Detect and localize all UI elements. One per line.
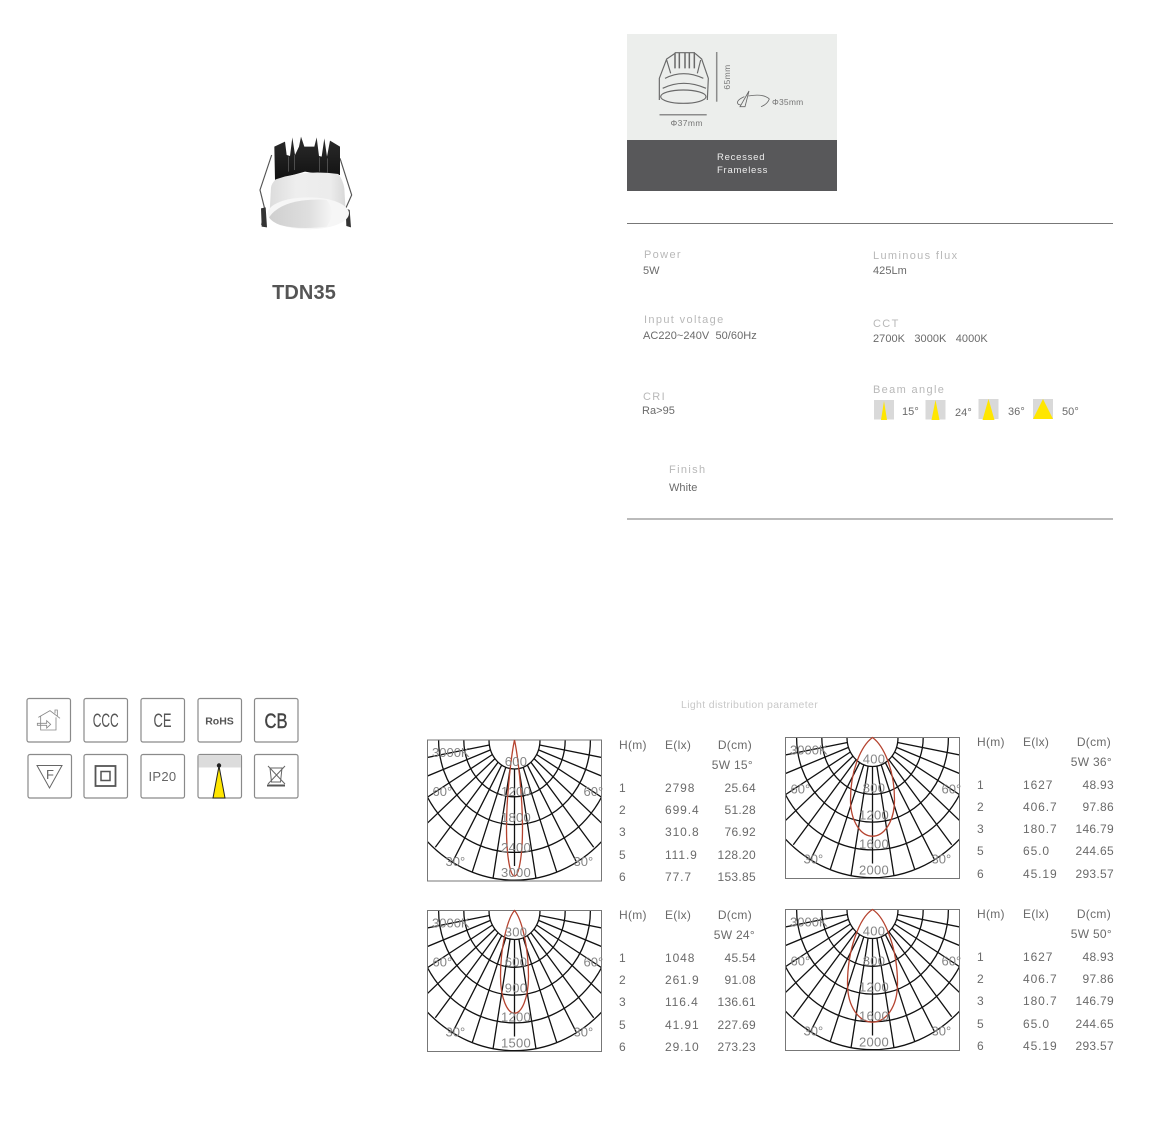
chart: 5W 24 degree polar diagram: 60° — [432, 954, 452, 970]
table: 5W 50 degree: E(lx) — [1023, 907, 1049, 921]
width dimension line — [660, 114, 707, 116]
table: 5W 24 degree: 1 — [619, 951, 626, 965]
table: 5W 15 degree: 25.64 — [724, 781, 756, 795]
icon: CB mark — [254, 698, 298, 742]
table: 5W 15 degree: 5W 15° — [712, 758, 753, 772]
table: 5W 50 degree: D(cm) — [1077, 907, 1111, 921]
table: 5W 24 degree: 261.9 — [665, 973, 700, 987]
product photo: recessed downlight — [260, 137, 352, 229]
table: 5W 24 degree — [619, 908, 756, 1054]
spec: beam angle: 24° — [955, 407, 972, 419]
icon: 15 degree beam — [874, 400, 894, 420]
icon: F mark — [28, 754, 72, 798]
chart: 5W 24 degree polar diagram: 30° — [574, 1024, 593, 1040]
table: 5W 15 degree: E(lx) — [665, 738, 691, 752]
table: 5W 15 degree: 153.85 — [717, 870, 756, 884]
table: 5W 50 degree: 3 — [977, 994, 984, 1008]
chart: 5W 15 degree polar diagram: 60° — [584, 784, 603, 799]
spec: CRI — [642, 391, 675, 417]
table: 5W 15 degree: 699.4 — [665, 803, 700, 817]
chart: 5W 24 degree polar diagram: 300 — [505, 924, 527, 940]
icon: IP20 mark: IP20 — [149, 769, 176, 784]
mounting type text — [717, 152, 768, 176]
chart: 5W 36 degree polar diagram: 1600 — [859, 836, 889, 852]
table: 5W 24 degree: 29.10 — [665, 1040, 700, 1054]
table: 5W 50 degree: H(m) — [977, 907, 1005, 921]
spec: CCT: 2700K 3000K 4000K — [873, 333, 988, 345]
icon: CE mark: CE — [154, 711, 172, 732]
table: 5W 36 degree: 6 — [977, 867, 984, 881]
chart: 5W 15 degree polar diagram: 1800 — [501, 810, 531, 825]
chart: 5W 50 degree polar diagram: 2000 — [859, 1034, 889, 1050]
table: 5W 36 degree: 244.65 — [1075, 844, 1114, 858]
table: 5W 50 degree: 5W 50° — [1071, 927, 1112, 941]
table: 5W 15 degree: 3 — [619, 825, 626, 839]
dimensions background — [627, 34, 837, 140]
table: 5W 15 degree: 77.7 — [665, 870, 692, 884]
mounting type text: Recessed — [717, 152, 765, 163]
spec: luminous flux — [873, 250, 958, 277]
certification icons — [27, 698, 298, 798]
table: 5W 36 degree: 65.0 — [1023, 844, 1050, 858]
table: 5W 50 degree: 6 — [977, 1039, 984, 1053]
icon: CCC mark: CCC — [93, 711, 119, 732]
table: 5W 36 degree: 5W 36° — [1071, 755, 1112, 769]
icon: F mark: F — [46, 767, 54, 782]
chart: 5W 36 degree polar diagram: 2000 — [859, 862, 889, 878]
spec: luminous flux: Luminous flux — [873, 250, 958, 262]
table: 5W 36 degree: 2 — [977, 800, 984, 814]
table: 5W 36 degree: 146.79 — [1075, 822, 1114, 836]
table: 5W 36 degree: E(lx) — [1023, 735, 1049, 749]
table: 5W 24 degree: E(lx) — [665, 908, 691, 922]
spec: input voltage: AC220~240V 50/60Hz — [643, 330, 757, 342]
table: 5W 50 degree: 48.93 — [1082, 950, 1114, 964]
panel: dimensions and mounting type — [627, 34, 837, 191]
icon: CCC mark — [84, 698, 128, 742]
spec: CRI: Ra>95 — [642, 405, 675, 417]
divider bottom — [627, 518, 1113, 520]
spec: power: Power — [644, 249, 682, 261]
chart: 5W 50 degree polar diagram: 60° — [790, 954, 810, 968]
chart: 5W 24 degree polar diagram: 30° — [446, 1024, 465, 1040]
table: 5W 15 degree: 111.9 — [665, 848, 698, 862]
table: 5W 50 degree: 5 — [977, 1017, 984, 1031]
table: 5W 24 degree: 6 — [619, 1040, 626, 1054]
table: 5W 36 degree: 97.86 — [1082, 800, 1114, 814]
table: 5W 15 degree: 51.28 — [724, 803, 756, 817]
spec: power — [643, 249, 682, 277]
height label: 65mm — [722, 64, 732, 90]
chart: 5W 50 degree polar diagram: 30° — [932, 1024, 951, 1038]
table: 5W 50 degree: 97.86 — [1082, 972, 1114, 986]
table: 5W 24 degree: 2 — [619, 973, 626, 987]
chart: 5W 50 degree polar diagram: 1600 — [859, 1008, 889, 1024]
chart: 5W 24 degree polar diagram: 60° — [584, 954, 603, 970]
table: 5W 15 degree: 310.8 — [665, 825, 700, 839]
table: 5W 24 degree: 41.91 — [665, 1018, 700, 1032]
chart: 5W 36 degree polar diagram: 1200 — [859, 808, 889, 822]
spec: CCT: CCT — [873, 318, 900, 330]
table: 5W 24 degree: 273.23 — [717, 1040, 756, 1054]
chart: 5W 50 degree polar diagram: 800 — [863, 954, 885, 968]
table: 5W 50 degree: 1 — [977, 950, 984, 964]
table: 5W 24 degree: 5 — [619, 1018, 626, 1032]
chart: 5W 36 degree polar diagram: 30° — [804, 852, 823, 866]
spec: beam angle — [873, 384, 1079, 420]
icon: recessed beam — [198, 754, 242, 798]
table: 5W 50 degree — [977, 907, 1114, 1053]
table: 5W 36 degree: H(m) — [977, 735, 1005, 749]
icon: 36 degree beam — [978, 399, 998, 420]
icon: class II double square — [84, 754, 128, 798]
table: 5W 50 degree: 2 — [977, 972, 984, 986]
table: 5W 24 degree: 116.4 — [665, 995, 699, 1009]
icon: CB mark: CB — [264, 710, 288, 733]
spec: beam angle: Beam angle — [873, 384, 945, 396]
table: 5W 15 degree: 2798 — [665, 781, 695, 795]
icon: fixture outline — [659, 53, 708, 103]
table: 5W 50 degree: 406.7 — [1023, 972, 1058, 986]
chart: 5W 50 degree polar diagram: 1200 — [859, 980, 889, 994]
table: 5W 24 degree: 3 — [619, 995, 626, 1009]
spec: finish: Finish — [669, 464, 706, 476]
chart: 5W 36 degree polar diagram: 400 — [863, 752, 885, 766]
chart: 5W 24 degree polar diagram: 3000K — [432, 916, 470, 930]
chart: 5W 36 degree polar diagram: 3000K — [790, 742, 828, 758]
table: 5W 24 degree: D(cm) — [718, 908, 752, 922]
chart: 5W 50 degree polar diagram: 30° — [804, 1024, 823, 1038]
table: 5W 24 degree: 45.54 — [724, 951, 756, 965]
chart: 5W 15 degree polar diagram: 600 — [505, 754, 527, 769]
table: 5W 36 degree: 1627 — [1023, 778, 1053, 792]
table: 5W 50 degree: 65.0 — [1023, 1017, 1050, 1031]
chart: 5W 36 degree polar diagram: 60° — [942, 782, 961, 796]
chart: 5W 15 degree polar diagram: 30° — [574, 854, 593, 869]
chart: 5W 36 degree polar diagram — [746, 597, 999, 878]
chart: 5W 15 degree polar diagram: 60° — [432, 784, 452, 799]
spec: CCT — [873, 318, 988, 345]
chart: 5W 24 degree polar diagram: 1200 — [501, 1010, 531, 1024]
table: 5W 24 degree: 227.69 — [717, 1018, 756, 1032]
table: 5W 36 degree: 48.93 — [1082, 778, 1114, 792]
table: 5W 15 degree: 128.20 — [717, 848, 756, 862]
table: 5W 36 degree: 3 — [977, 822, 984, 836]
icon: cut-out hole and saw — [737, 91, 769, 107]
icon: 50 degree beam — [1033, 399, 1053, 419]
width label: Φ37mm — [670, 118, 703, 128]
chart: 5W 15 degree polar diagram: 30° — [446, 854, 465, 869]
spec: luminous flux: 425Lm — [873, 265, 907, 277]
table: 5W 24 degree: 1048 — [665, 951, 695, 965]
chart: 5W 36 degree polar diagram: 60° — [790, 782, 810, 796]
chart: 5W 24 degree polar diagram — [388, 770, 641, 1052]
table: 5W 15 degree: H(m) — [619, 738, 647, 752]
spec: power: 5W — [643, 265, 660, 277]
chart: 5W 36 degree polar diagram: 30° — [932, 852, 951, 866]
spec: beam angle: 36° — [1008, 406, 1025, 418]
chart: 5W 24 degree polar diagram: 900 — [505, 980, 527, 996]
chart: 5W 15 degree polar diagram: 3000 — [501, 865, 531, 880]
chart: 5W 24 degree polar diagram: 1500 — [501, 1036, 531, 1050]
chart: 5W 24 degree polar diagram: 600 — [505, 954, 527, 970]
table: 5W 36 degree: 45.19 — [1023, 867, 1058, 881]
icon: RoHS mark — [198, 698, 242, 742]
table: 5W 36 degree: 180.7 — [1023, 822, 1058, 836]
table: 5W 50 degree: 146.79 — [1075, 994, 1114, 1008]
table: 5W 15 degree: D(cm) — [718, 738, 752, 752]
chart: 5W 15 degree polar diagram: 2400 — [501, 840, 531, 855]
chart: 5W 36 degree polar diagram: 800 — [863, 780, 885, 796]
chart: 5W 50 degree polar diagram: 3000K — [790, 914, 828, 930]
spec: beam angle: 15° — [902, 406, 919, 418]
spec: finish — [669, 464, 706, 494]
table: 5W 15 degree — [619, 738, 756, 884]
product name: TDN35 — [272, 282, 336, 304]
table: 5W 36 degree: 293.57 — [1075, 867, 1114, 881]
icon: indoor use — [27, 698, 70, 742]
table: 5W 15 degree: 1 — [619, 781, 626, 795]
icon: 24 degree beam — [926, 400, 946, 420]
table: 5W 15 degree: 5 — [619, 848, 626, 862]
table: 5W 50 degree: 244.65 — [1075, 1017, 1114, 1031]
spec: beam angle: 50° — [1062, 406, 1079, 418]
chart: 5W 15 degree polar diagram: 1200 — [501, 784, 531, 799]
hole label: Φ35mm — [772, 97, 803, 107]
table: 5W 24 degree: 136.61 — [717, 995, 756, 1009]
chart: 5W 15 degree polar diagram: 3000K — [432, 745, 470, 760]
table: 5W 50 degree: 1627 — [1023, 950, 1053, 964]
table: 5W 36 degree: D(cm) — [1077, 735, 1111, 749]
spec: finish: White — [669, 482, 697, 494]
table: 5W 24 degree: 5W 24° — [714, 928, 755, 942]
chart: 5W 50 degree polar diagram: 400 — [863, 924, 885, 938]
mounting type band — [627, 140, 837, 191]
chart: 5W 15 degree polar diagram — [388, 600, 641, 881]
divider top — [627, 222, 1113, 224]
table: 5W 50 degree: 45.19 — [1023, 1039, 1058, 1053]
spec: input voltage: Input voltage — [644, 314, 725, 326]
spec: input voltage — [643, 314, 757, 342]
table: 5W 15 degree: 2 — [619, 803, 626, 817]
mounting type text: Frameless — [717, 165, 768, 176]
height dimension line — [716, 52, 718, 102]
icon: RoHS mark: RoHS — [205, 716, 234, 728]
section heading: Light distribution parameter — [681, 699, 818, 711]
table: 5W 36 degree: 5 — [977, 844, 984, 858]
table: 5W 36 degree: 1 — [977, 778, 984, 792]
table: 5W 36 degree: 406.7 — [1023, 800, 1058, 814]
chart: 5W 50 degree polar diagram — [746, 769, 999, 1050]
icon: CE mark — [141, 698, 184, 742]
icon: WEEE crossed bin — [254, 754, 298, 798]
table: 5W 50 degree: 180.7 — [1023, 994, 1058, 1008]
icon: IP20 mark — [141, 754, 184, 798]
table: 5W 50 degree: 293.57 — [1075, 1039, 1114, 1053]
table: 5W 15 degree: 76.92 — [724, 825, 756, 839]
table: 5W 24 degree: H(m) — [619, 908, 647, 922]
spec: CRI: CRI — [643, 391, 666, 403]
table: 5W 24 degree: 91.08 — [724, 973, 756, 987]
chart: 5W 50 degree polar diagram: 60° — [942, 954, 961, 968]
table: 5W 15 degree: 6 — [619, 870, 626, 884]
table: 5W 36 degree — [977, 735, 1114, 881]
